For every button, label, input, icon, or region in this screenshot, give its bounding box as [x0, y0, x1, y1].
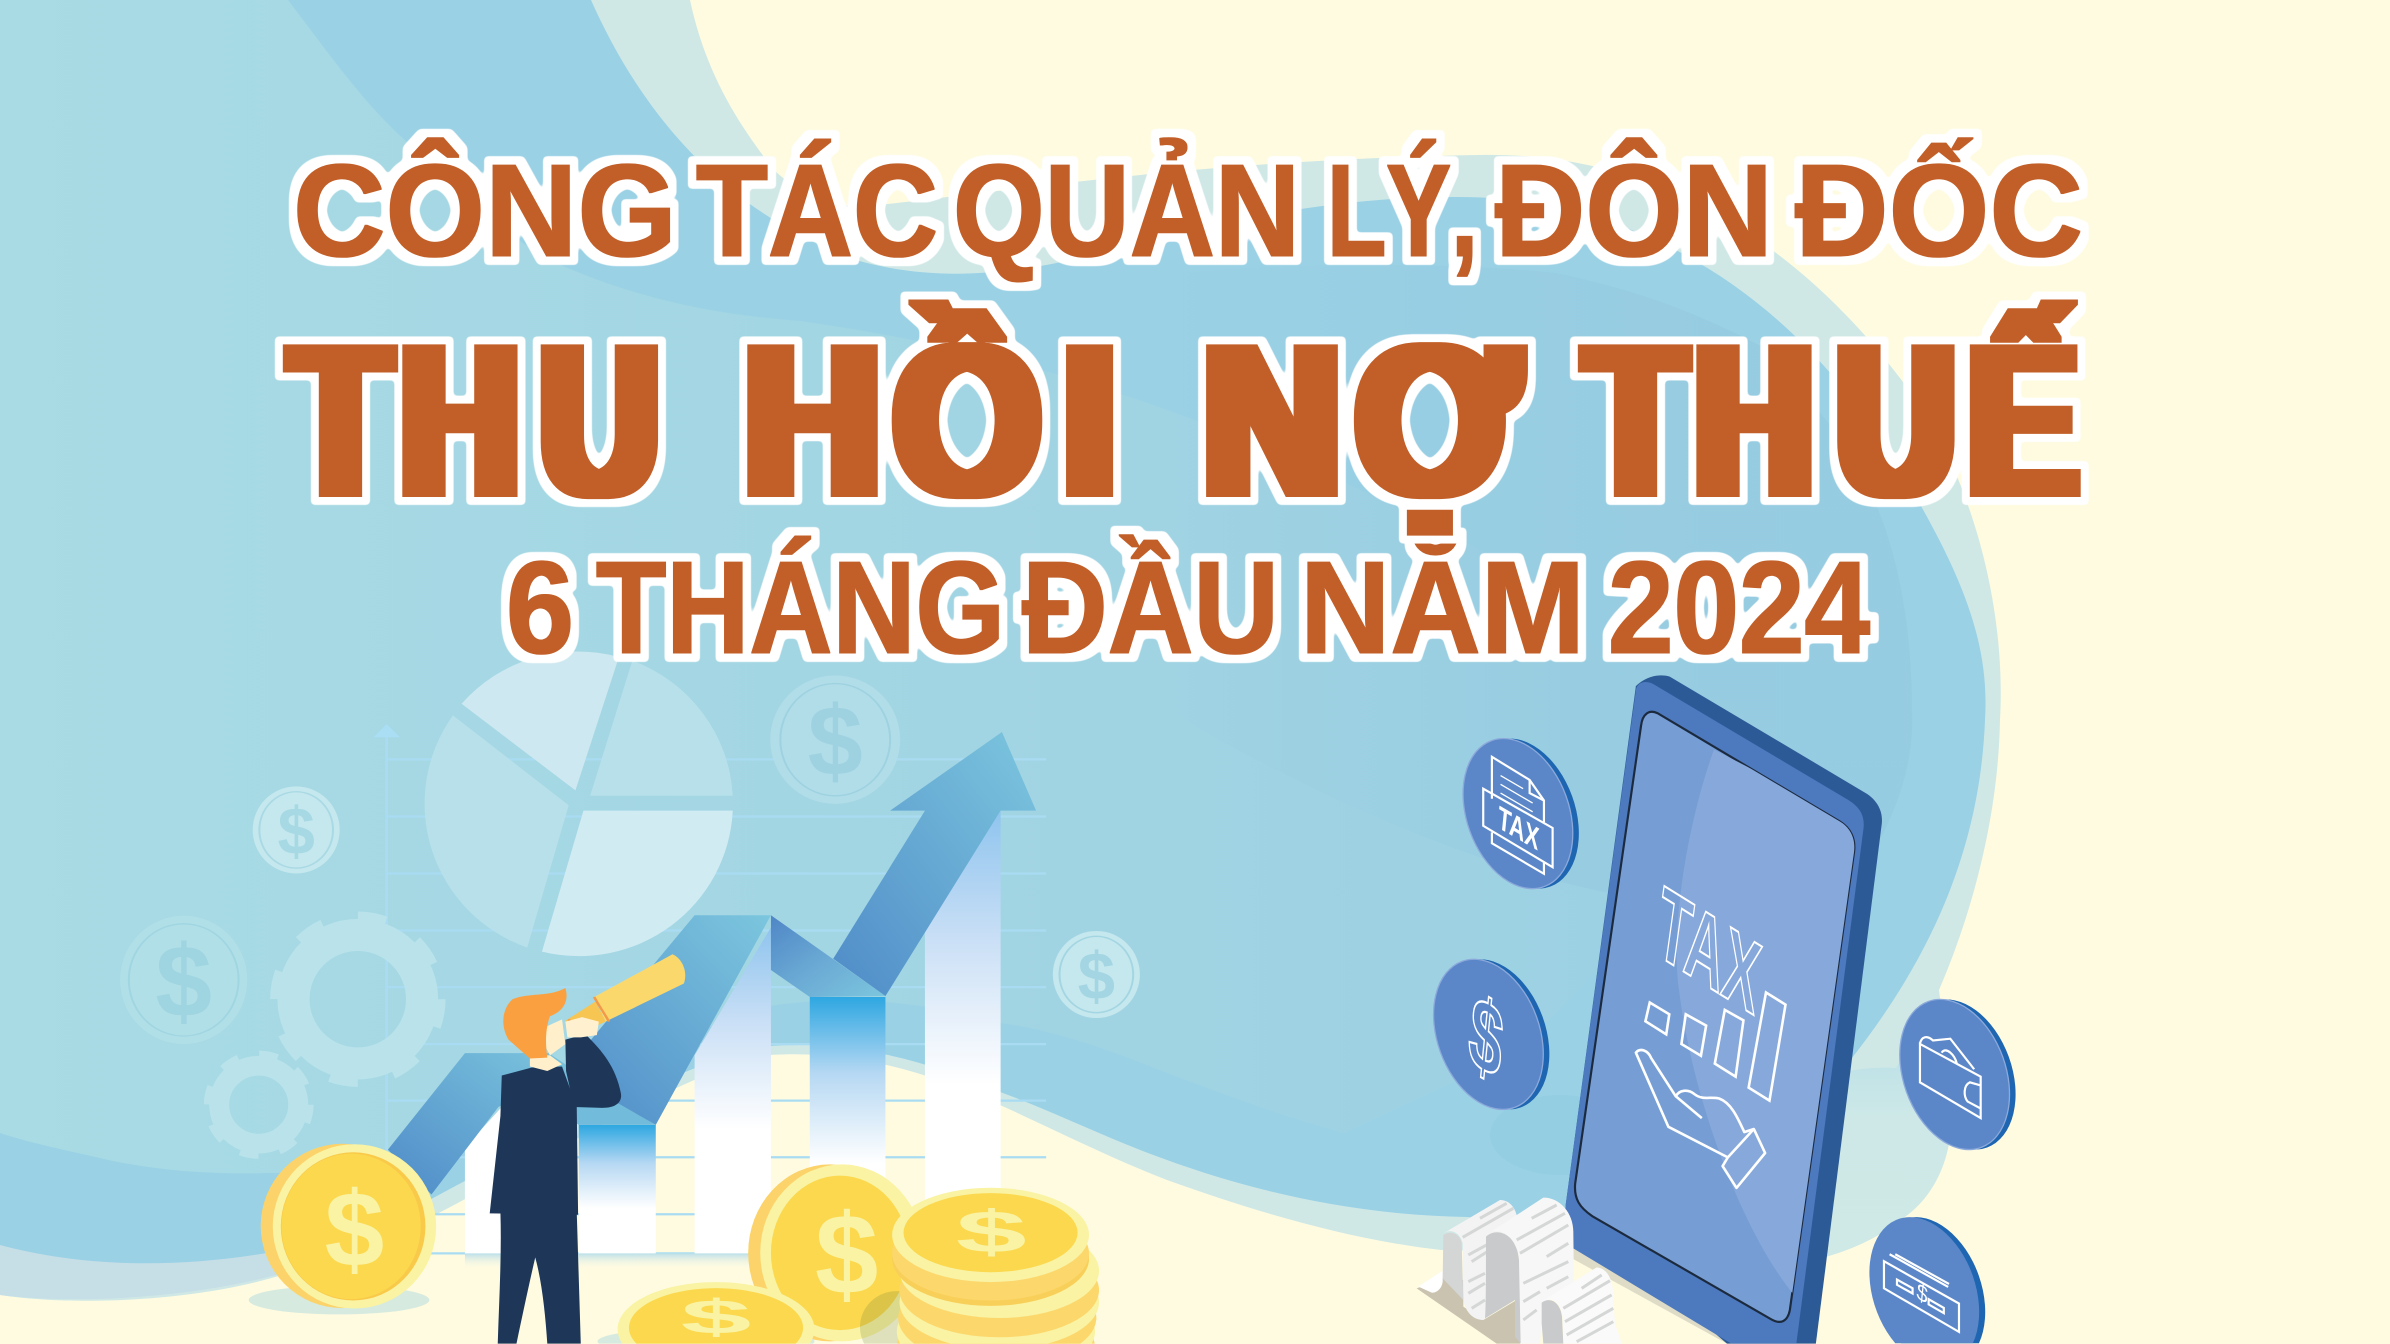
screen highlight	[1677, 749, 1861, 1293]
flat coin bottom centre	[598, 1282, 814, 1344]
title line 1: Công tác quản lý, đôn đốc: CÔNG	[293, 137, 677, 284]
TAX label on screen: TAX	[1651, 865, 1767, 1037]
coin stack	[860, 1188, 1099, 1344]
small gear	[208, 1055, 310, 1155]
right phone illustration	[1414, 675, 2035, 1344]
phone screen	[1575, 712, 1854, 1322]
back receipt strip	[1443, 1200, 1517, 1320]
title line 2: Thu hồi nợ thuế: NỢ	[1203, 301, 1519, 542]
phone body side	[1566, 675, 1882, 1344]
middle receipt strip	[1485, 1198, 1574, 1344]
hair	[503, 988, 567, 1058]
flat coin bottom centre: $	[681, 1291, 751, 1344]
dollar medallion large left	[120, 916, 247, 1044]
disc icon: tax document: TAX	[1496, 799, 1541, 858]
disc icon: banknote: $	[1916, 1277, 1929, 1309]
title line 1: Công tác quản lý, đôn đốc: TÁC	[696, 137, 938, 284]
coin stack: $	[956, 1199, 1027, 1265]
dollar medallion small left: $	[278, 794, 315, 869]
darker blue inner shade	[1150, 265, 1912, 906]
left large coin	[261, 1144, 436, 1309]
title line 3: 6 tháng đầu năm 2024: 6	[506, 534, 574, 681]
hands	[565, 1017, 599, 1037]
dollar medallion small left	[253, 786, 340, 873]
dollar medallion small right	[1053, 931, 1140, 1018]
disc icon: tax document	[1443, 723, 1598, 904]
pie chart	[425, 651, 733, 956]
phone floor shadow	[1571, 1247, 1796, 1344]
dollar medallion large left: $	[155, 924, 212, 1038]
title line 3: 6 tháng đầu năm 2024: ĐẦU	[1022, 534, 1279, 681]
title line 3: 6 tháng đầu năm 2024: NĂM	[1300, 534, 1585, 681]
title line 2: Thu hồi nợ thuế: THU	[291, 300, 658, 541]
dollar medallion small right: $	[1078, 939, 1115, 1014]
man with telescope	[490, 954, 685, 1344]
title line 1: Công tác quản lý, đôn đốc: ĐÔN	[1495, 137, 1773, 284]
telescope	[565, 954, 685, 1034]
bluish lobe under the right disc	[1760, 1000, 1950, 1260]
title line 3: 6 tháng đầu năm 2024: THÁNG	[596, 534, 1005, 681]
title line 2: Thu hồi nợ thuế	[291, 300, 2077, 542]
dollar medallion top centre: $	[808, 685, 863, 796]
jacket	[490, 1067, 578, 1215]
disc icon: wallet	[1880, 984, 2035, 1165]
title line 3: 6 tháng đầu năm 2024: 2024	[1608, 534, 1870, 681]
receipt shadow	[1417, 1278, 1521, 1344]
dollar medallion top centre	[770, 675, 900, 804]
hand icon	[1636, 1050, 1765, 1188]
title line 1: Công tác quản lý, đôn đốc: QUẢN	[953, 137, 1300, 284]
floor shading under bars	[465, 1253, 773, 1269]
front receipt strip	[1542, 1267, 1622, 1344]
raised arm	[565, 1034, 621, 1108]
screen bar icons	[1645, 992, 1786, 1101]
bottom-left pale band tint	[0, 1235, 320, 1299]
title line 3: 6 tháng đầu năm 2024	[506, 534, 1870, 681]
bar columns	[465, 811, 1001, 1253]
title line 1: Công tác quản lý, đôn đốc	[293, 137, 2083, 284]
left large coin: $	[325, 1169, 384, 1289]
neck and face	[530, 1019, 565, 1071]
title line 1: Công tác quản lý, đôn đốc: LÝ,	[1327, 137, 1478, 284]
soft shade lobe left of phone	[1490, 1095, 1630, 1175]
paper receipts	[1417, 1198, 1622, 1344]
disc icon: dollar	[1414, 944, 1569, 1125]
left chart illustration	[120, 651, 1140, 1344]
lighter teal wash on the left	[0, 0, 1658, 1173]
main blue blob	[0, 0, 1986, 1263]
receipt flap	[1418, 1271, 1443, 1293]
phone front face	[1565, 682, 1864, 1344]
title line 2: Thu hồi nợ thuế: HỒI	[745, 300, 1116, 541]
title	[291, 137, 2083, 681]
large gear	[276, 918, 439, 1081]
disc icon: dollar: $	[1464, 972, 1508, 1101]
centre big coin	[748, 1164, 924, 1341]
disc icon: banknote	[1869, 1217, 1985, 1343]
title line 1: Công tác quản lý, đôn đốc: ĐỐC	[1795, 137, 2083, 284]
chart grid and axis	[373, 724, 1046, 1253]
title line 2: Thu hồi nợ thuế: THUẾ	[1586, 300, 2077, 541]
coin shadow	[249, 1286, 429, 1314]
legs	[498, 1212, 581, 1344]
rising arrow	[388, 732, 1036, 1195]
centre big coin: $	[815, 1192, 878, 1319]
